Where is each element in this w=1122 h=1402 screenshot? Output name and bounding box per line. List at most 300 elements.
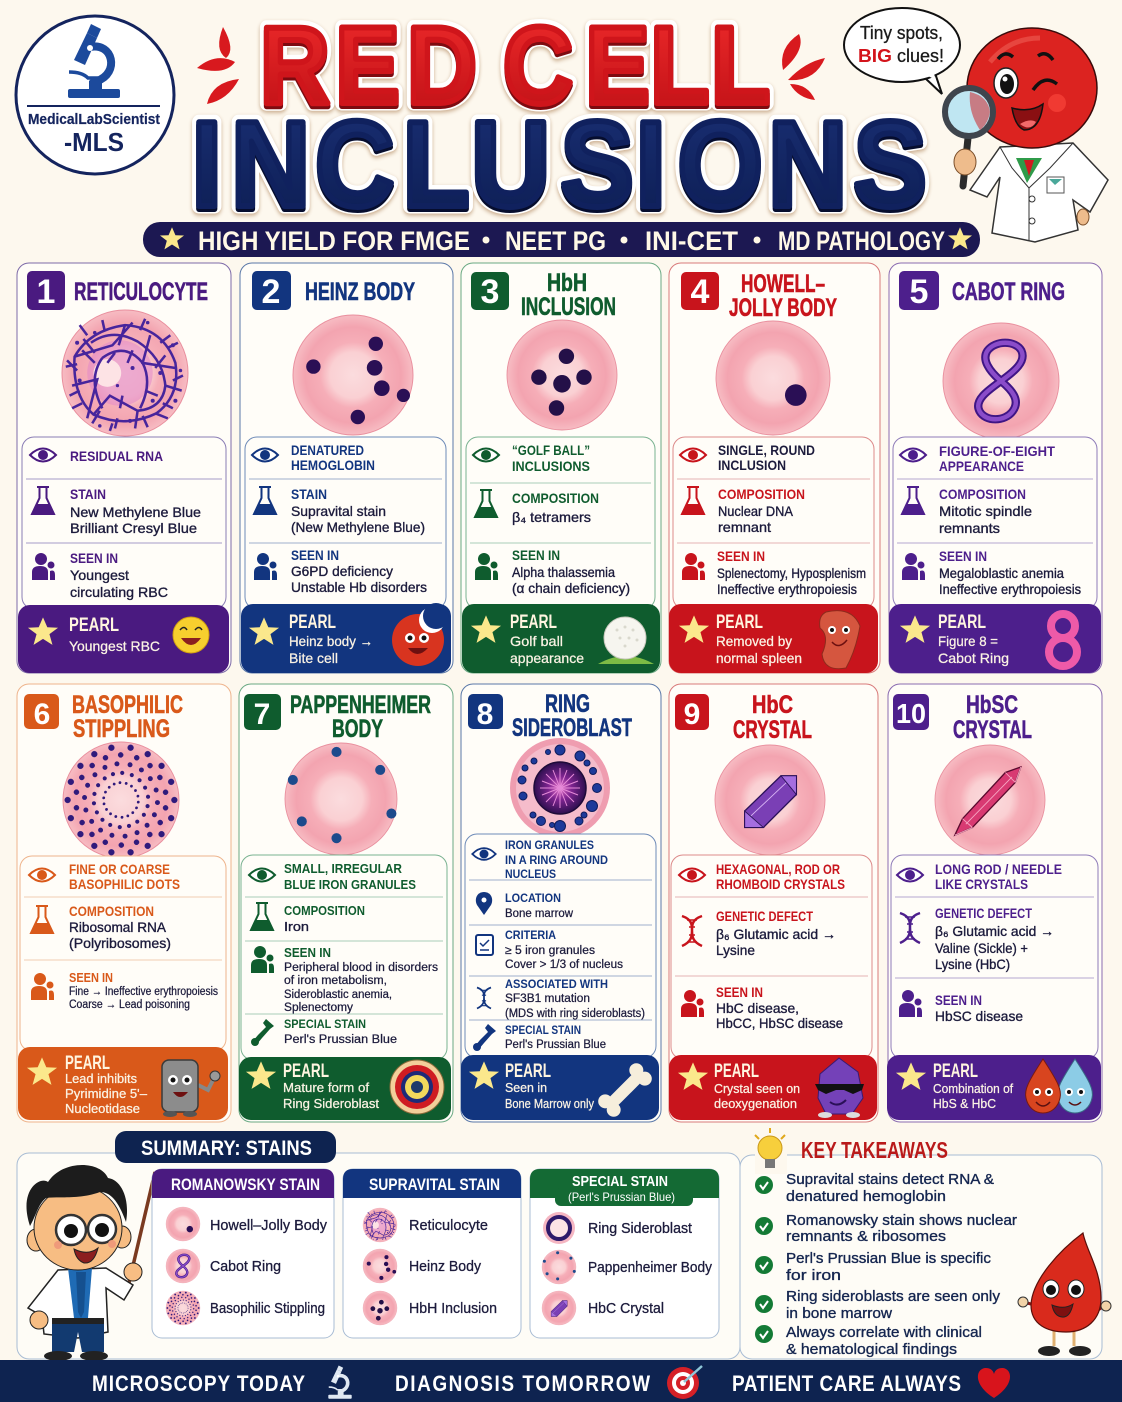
definition row: INCLUSIONS	[512, 458, 590, 474]
seen in row	[475, 547, 630, 596]
definition row: IN A RING AROUND	[505, 853, 608, 867]
icon: bone	[595, 1060, 655, 1120]
heading	[290, 691, 431, 743]
number badge 9: 9	[684, 698, 700, 731]
pearl: Lead inhibits	[65, 1072, 137, 1086]
pearl	[461, 1055, 659, 1120]
definition row: “GOLF BALL”	[512, 442, 590, 458]
icon: smiley	[173, 617, 209, 653]
number badge 7	[244, 694, 281, 731]
composition row: Iron	[284, 919, 309, 934]
seen in row: Splenectomy, Hyposplenism	[717, 565, 866, 581]
definition row: FIGURE-OF-EIGHT	[939, 443, 1055, 459]
pearl: Mature form of	[283, 1081, 370, 1095]
logo: MedicalLabScientist	[16, 16, 174, 174]
genetic defect row: Lysine	[716, 942, 755, 958]
pearl: Ring Sideroblast	[283, 1097, 380, 1111]
illustration: Heinz body	[293, 315, 413, 435]
composition row: remnant	[718, 519, 771, 535]
definition row: IRON GRANULES	[505, 838, 594, 852]
takeaway 3: Perl's Prussian Blue is specific	[786, 1250, 991, 1267]
pearl: Removed by	[716, 633, 792, 649]
criteria row: CRITERIA	[505, 928, 556, 942]
illustration: basophilic stippling	[63, 742, 179, 858]
details panel	[891, 855, 1098, 1059]
pearl	[887, 1055, 1101, 1120]
number badge 6	[24, 694, 59, 731]
heading: CRYSTAL	[953, 716, 1032, 744]
icon: lead barrel	[162, 1060, 220, 1117]
number badge 4: 4	[691, 273, 710, 311]
definition row: LIKE CRYSTALS	[935, 876, 1028, 892]
takeaway 5: Always correlate with clinical	[786, 1324, 982, 1341]
seen in row: HbC disease,	[716, 1000, 799, 1016]
item: HbC crystal: HbC Crystal	[588, 1301, 664, 1317]
takeaway 3	[755, 1250, 991, 1284]
icon: crystal with sunglasses	[815, 1058, 864, 1118]
definition row: BLUE IRON GRANULES	[284, 877, 416, 892]
heading: CRYSTAL	[733, 716, 812, 744]
seen in row: Youngest	[70, 567, 129, 583]
heading: HOWELL–	[741, 270, 825, 298]
seen in row: Unstable Hb disorders	[291, 579, 427, 595]
card 3: HbH inclusion	[461, 263, 661, 673]
heading: CABOT RING	[952, 278, 1065, 306]
composition row	[475, 490, 599, 525]
pearl: Crystal seen on	[714, 1082, 800, 1096]
summary panel: stains	[17, 1131, 740, 1361]
seen in row: SEEN IN	[716, 984, 763, 1000]
footer banner: MICROSCOPY TODAY	[92, 1372, 305, 1396]
genetic defect row: GENETIC DEFECT	[935, 905, 1032, 921]
seen in row: Fine → Ineffective erythropoiesis	[69, 986, 218, 998]
number badge 4	[681, 272, 719, 311]
icon: spleen	[820, 611, 860, 669]
genetic defect row: β₆ Glutamic acid →	[716, 926, 836, 942]
seen in row: SEEN IN	[717, 548, 765, 564]
item: Pappenheimer body	[542, 1250, 713, 1284]
seen in row: Ineffective erythropoiesis	[717, 581, 857, 597]
column: special stain: SPECIAL STAIN	[572, 1173, 668, 1190]
heading: PAPPENHEIMER	[290, 691, 431, 719]
item: Heinz body	[363, 1249, 482, 1283]
column: Supravital stain: SUPRAVITAL STAIN	[369, 1175, 500, 1194]
definition row	[473, 442, 590, 474]
definition row: SINGLE, ROUND	[718, 442, 815, 458]
seen in row: G6PD deficiency	[291, 563, 393, 579]
criteria row: ≥ 5 iron granules	[505, 945, 595, 957]
illustration: Howell-Jolly body	[716, 321, 830, 435]
details panel	[465, 834, 656, 1058]
seen in row	[681, 984, 843, 1031]
column: Supravital stain	[343, 1169, 521, 1338]
takeaway 1: Supravital stains detect RNA &	[786, 1171, 994, 1188]
seen in row: Alpha thalassemia	[512, 564, 615, 580]
icon: drops	[1026, 1059, 1092, 1113]
definition row: DENATURED	[291, 442, 364, 458]
seen in row: SEEN IN	[70, 550, 118, 566]
definition row	[472, 838, 608, 881]
number badge 1: 1	[37, 273, 55, 311]
number badge 3: 3	[481, 273, 499, 311]
number badge 5	[899, 271, 939, 311]
definition row	[29, 861, 180, 892]
seen in row	[899, 990, 1023, 1024]
heading: RETICULOCYTE	[74, 278, 208, 306]
composition row: β₄ tetramers	[512, 509, 591, 525]
special stain row	[473, 1023, 606, 1051]
pearl: PEARL	[938, 612, 986, 633]
heading: HEINZ BODY	[305, 278, 415, 306]
special stain row: SPECIAL STAIN	[284, 1017, 366, 1031]
seen in row: Coarse → Lead poisoning	[69, 999, 190, 1011]
definition row: NUCLEUS	[505, 867, 556, 881]
pearl: PEARL	[69, 615, 119, 636]
seen in row: SEEN IN	[284, 945, 331, 960]
icon: target	[390, 1060, 444, 1114]
heading: STIPPLING	[73, 715, 170, 743]
pearl	[241, 603, 451, 673]
stain row: (New Methylene Blue)	[291, 519, 425, 535]
icon: heart	[978, 1368, 1010, 1398]
details panel	[245, 437, 446, 609]
composition row: COMPOSITION	[939, 486, 1026, 502]
seen in row: (α chain deficiency)	[512, 580, 630, 596]
pearl: Seen in	[505, 1081, 547, 1095]
takeaway 5: & hematological findings	[786, 1341, 957, 1358]
composition row: Nuclear DNA	[718, 503, 794, 519]
logo: MedicalLabScientist: MedicalLabScientist	[28, 112, 160, 128]
details panel	[673, 437, 874, 609]
illustration: HbH inclusion	[507, 320, 617, 430]
title: Red Cell Inclusions	[192, 3, 927, 232]
seen in row: Splenectomy	[284, 1002, 353, 1014]
card 10: HbSC crystal	[887, 684, 1102, 1122]
banner: high yield: NEET PG	[505, 226, 606, 256]
seen in row	[251, 945, 438, 1014]
card 6: Basophilic stippling	[17, 684, 231, 1122]
icon: magenta eight	[1049, 614, 1077, 666]
special stain row: SPECIAL STAIN	[505, 1023, 581, 1037]
genetic defect row	[682, 908, 836, 958]
pearl	[18, 605, 229, 673]
definition row: HEXAGONAL, ROD OR	[716, 861, 840, 877]
composition row: Mitotic spindle	[939, 503, 1032, 519]
title: Red Cell Inclusions: RED CELL	[260, 3, 770, 126]
item: Cabot ring: Cabot Ring	[210, 1259, 281, 1275]
heading	[953, 691, 1032, 744]
pearl: PEARL	[933, 1061, 978, 1082]
composition row: remnants	[939, 520, 1000, 536]
composition row: COMPOSITION	[718, 486, 805, 502]
illustration: Cabot ring	[943, 323, 1059, 439]
details panel	[241, 855, 447, 1060]
number badge 2: 2	[262, 273, 280, 311]
seen in row	[254, 547, 427, 595]
seen in row: SEEN IN	[939, 548, 987, 564]
heading	[512, 690, 632, 742]
association row: SF3B1 mutation	[505, 993, 590, 1005]
pearl	[669, 604, 878, 673]
mascot: blood drop	[1018, 1233, 1111, 1356]
pearl: appearance	[510, 650, 584, 666]
details panel	[20, 856, 226, 1051]
title: Red Cell Inclusions: INCLUSIONS	[192, 96, 927, 232]
item: basophilic stippling	[166, 1291, 325, 1325]
item: reticulocyte	[363, 1208, 488, 1242]
association row: ASSOCIATED WITH	[505, 977, 608, 991]
pearl	[18, 1047, 228, 1120]
stain row: Brilliant Cresyl Blue	[70, 520, 197, 536]
number badge 5: 5	[910, 273, 928, 311]
pearl: PEARL	[714, 1061, 759, 1082]
teacher character	[26, 1165, 155, 1361]
stain row	[32, 486, 201, 536]
number badge 2	[252, 271, 291, 311]
pearl: PEARL	[716, 612, 763, 633]
pearl: Combination of	[933, 1082, 1013, 1096]
heading	[521, 269, 616, 321]
seen in row: Megaloblastic anemia	[939, 565, 1064, 581]
criteria row: Cover > 1/3 of nucleus	[505, 959, 623, 971]
title: Red Cell Inclusions: RED CELL	[260, 3, 770, 126]
definition row: APPEARANCE	[939, 458, 1024, 474]
heading: SIDEROBLAST	[512, 714, 632, 742]
illustration: Pappenheimer body	[285, 743, 397, 855]
column: Romanowsky stain	[152, 1169, 334, 1338]
location row: Bone marrow	[505, 908, 574, 920]
seen in row	[32, 550, 168, 600]
takeaways heading: KEY TAKEAWAYS	[801, 1137, 948, 1163]
summary heading: SUMMARY: STAINS	[141, 1137, 312, 1160]
illustration: reticulocyte	[62, 310, 188, 436]
number badge 8: 8	[477, 698, 493, 731]
seen in row: Peripheral blood in disorders	[284, 962, 438, 974]
decorative red splashes	[197, 27, 825, 104]
takeaway 2	[755, 1212, 1017, 1245]
composition row	[251, 903, 365, 934]
definition row: LONG ROD / NEEDLE	[935, 861, 1062, 877]
speech bubble: clues!	[897, 46, 944, 66]
column: special stain: (Perl's Prussian Blue)	[568, 1190, 675, 1204]
takeaway 4: in bone marrow	[786, 1305, 892, 1322]
speech bubble	[844, 8, 960, 94]
heading	[733, 691, 812, 744]
card 7: Pappenheimer body	[239, 684, 453, 1122]
stain row	[254, 486, 425, 535]
pearl: normal spleen	[716, 650, 802, 666]
takeaway 2: Romanowsky stain shows nuclear	[786, 1212, 1017, 1229]
heading: BASOPHILIC	[72, 691, 183, 719]
icon: microscope	[328, 1365, 352, 1399]
stain row: Supravital stain	[291, 503, 386, 519]
pearl: Heinz body →	[289, 633, 373, 649]
seen in row	[902, 548, 1081, 597]
details panel	[671, 855, 872, 1059]
genetic defect row: Valine (Sickle) +	[935, 940, 1028, 956]
number badge 10: 10	[896, 698, 926, 729]
takeaway 1: denatured hemoglobin	[786, 1188, 946, 1205]
definition row: HEMOGLOBIN	[291, 457, 375, 473]
takeaway 3: for iron	[786, 1267, 841, 1284]
definition row: SMALL, IRREGULAR	[284, 861, 403, 876]
pearl	[889, 604, 1101, 673]
item: ring sideroblast: Ring Sideroblast	[588, 1221, 692, 1237]
item: HbH inclusion	[363, 1291, 497, 1325]
special stain row: Perl's Prussian Blue	[505, 1039, 606, 1051]
location row: LOCATION	[505, 891, 561, 905]
item: Pappenheimer body: Pappenheimer Body	[588, 1260, 713, 1276]
pearl: PEARL	[510, 612, 557, 633]
illustration: HbSC crystal	[935, 745, 1045, 855]
banner: high yield: HIGH YIELD FOR FMGE	[198, 226, 470, 256]
details panel	[466, 437, 655, 609]
heading: JOLLY BODY	[729, 294, 837, 322]
seen in row: HbSC disease	[935, 1008, 1023, 1024]
illustration: HbC crystal	[715, 745, 825, 855]
definition row	[249, 861, 416, 892]
seen in row	[682, 548, 866, 597]
logo: MedicalLabScientist: -MLS	[64, 127, 124, 157]
heading	[72, 691, 183, 743]
card 9: HbC crystal	[669, 684, 878, 1122]
pearl	[462, 604, 660, 673]
details panel	[22, 437, 226, 609]
item: Howell-Jolly body: Howell–Jolly Body	[210, 1218, 328, 1234]
number badge 7: 7	[254, 698, 270, 731]
number badge 8	[468, 694, 503, 731]
card 4: Howell-Jolly body	[669, 263, 880, 673]
number badge 9	[675, 694, 709, 731]
pearl: PEARL	[505, 1061, 551, 1082]
pearl: Bite cell	[289, 650, 338, 666]
seen in row: HbCC, HbSC disease	[716, 1015, 843, 1031]
seen in row: of iron metabolism,	[284, 975, 387, 987]
definition row: INCLUSION	[718, 457, 786, 473]
definition row: RESIDUAL RNA	[70, 448, 163, 464]
footer banner: PATIENT CARE ALWAYS	[732, 1372, 961, 1396]
item: reticulocyte: Reticulocyte	[409, 1218, 488, 1234]
association row	[477, 977, 645, 1020]
banner: high yield: MD PATHOLOGY	[778, 226, 945, 256]
card 1: Reticulocyte	[17, 263, 231, 673]
criteria row	[476, 928, 623, 971]
speech bubble: BIG	[858, 46, 892, 66]
item: basophilic stippling: Basophilic Stippling	[210, 1301, 325, 1317]
illustration: ring sideroblast	[510, 738, 610, 838]
takeaway 5	[755, 1324, 982, 1358]
number badge 3	[471, 272, 509, 311]
genetic defect row: GENETIC DEFECT	[716, 908, 813, 924]
seen in row: SEEN IN	[512, 547, 560, 563]
definition row	[680, 442, 815, 473]
seen in row: Ineffective erythropoiesis	[939, 581, 1081, 597]
icon: target	[667, 1366, 702, 1399]
genetic defect row: Lysine (HbC)	[935, 956, 1010, 972]
genetic defect row: β₆ Glutamic acid →	[935, 923, 1054, 939]
composition row: COMPOSITION	[284, 903, 365, 918]
definition row	[897, 861, 1062, 892]
pearl: Pyrimidine 5'–	[65, 1087, 147, 1101]
item: ring sideroblast	[543, 1212, 692, 1244]
heading: INCLUSION	[521, 293, 616, 321]
icon: golf ball	[598, 617, 654, 664]
takeaway 1	[755, 1171, 994, 1205]
pearl: PEARL	[65, 1053, 110, 1074]
pearl: Figure 8 =	[938, 633, 998, 649]
pearl: Cabot Ring	[938, 650, 1009, 666]
card 2: Heinz body	[240, 263, 453, 673]
item: Heinz body: Heinz Body	[409, 1259, 482, 1275]
card 5: Cabot ring	[889, 263, 1102, 673]
definition row	[679, 861, 845, 892]
banner: high yield: INI-CET	[645, 226, 738, 256]
mascot: red cell with magnifier	[945, 28, 1108, 242]
heading	[729, 270, 837, 322]
pearl: Nucleotidase	[65, 1102, 140, 1116]
column: Romanowsky stain: ROMANOWSKY STAIN	[171, 1175, 320, 1194]
pearl: Youngest RBC	[69, 638, 160, 654]
takeaway 4	[755, 1288, 1000, 1322]
genetic defect row	[900, 905, 1054, 972]
icon: light bulb	[755, 1128, 787, 1174]
pearl: Bone Marrow only	[505, 1097, 595, 1111]
stain row: New Methylene Blue	[70, 504, 201, 520]
heading: RING	[545, 690, 590, 718]
composition row: Ribosomal RNA	[69, 919, 167, 935]
seen in row: SEEN IN	[935, 992, 982, 1008]
definition row	[900, 443, 1055, 474]
definition row: RHOMBOID CRYSTALS	[716, 876, 845, 892]
item: Howell-Jolly body	[166, 1207, 328, 1241]
footer banner	[0, 1360, 1122, 1402]
pearl: Golf ball	[510, 633, 563, 649]
location row	[476, 891, 574, 920]
summary heading	[115, 1131, 336, 1163]
banner: high yield	[143, 222, 980, 257]
composition row	[682, 486, 805, 535]
pearl	[239, 1057, 451, 1120]
pearl: deoxygenation	[714, 1097, 797, 1111]
special stain row: Perl's Prussian Blue	[284, 1034, 397, 1046]
heading: HbC	[752, 691, 793, 719]
card 8: Ring sideroblast	[461, 684, 661, 1122]
composition row	[902, 486, 1032, 536]
definition row: BASOPHILIC DOTS	[69, 876, 180, 892]
takeaway 4: Ring sideroblasts are seen only	[786, 1288, 1000, 1305]
definition row: FINE OR COARSE	[69, 861, 170, 877]
pearl	[669, 1055, 877, 1120]
takeaway 2: remnants & ribosomes	[786, 1228, 946, 1245]
special stain row	[251, 1017, 397, 1046]
details panel	[893, 437, 1097, 609]
icon: bite cell	[392, 603, 449, 666]
seen in row: SEEN IN	[291, 547, 339, 563]
composition row: COMPOSITION	[69, 903, 154, 919]
definition row	[252, 442, 375, 473]
seen in row: Sideroblastic anemia,	[284, 989, 392, 1001]
stain row: STAIN	[291, 486, 327, 502]
composition row	[31, 903, 171, 951]
heading: HbH	[547, 269, 587, 297]
item: HbH inclusion: HbH Inclusion	[409, 1301, 497, 1317]
item: Cabot ring	[166, 1249, 281, 1283]
pearl: HbS & HbC	[933, 1097, 996, 1111]
pearl: PEARL	[283, 1061, 329, 1082]
definition row	[30, 448, 163, 464]
key takeaways panel	[740, 1128, 1111, 1359]
stain row: STAIN	[70, 486, 106, 502]
